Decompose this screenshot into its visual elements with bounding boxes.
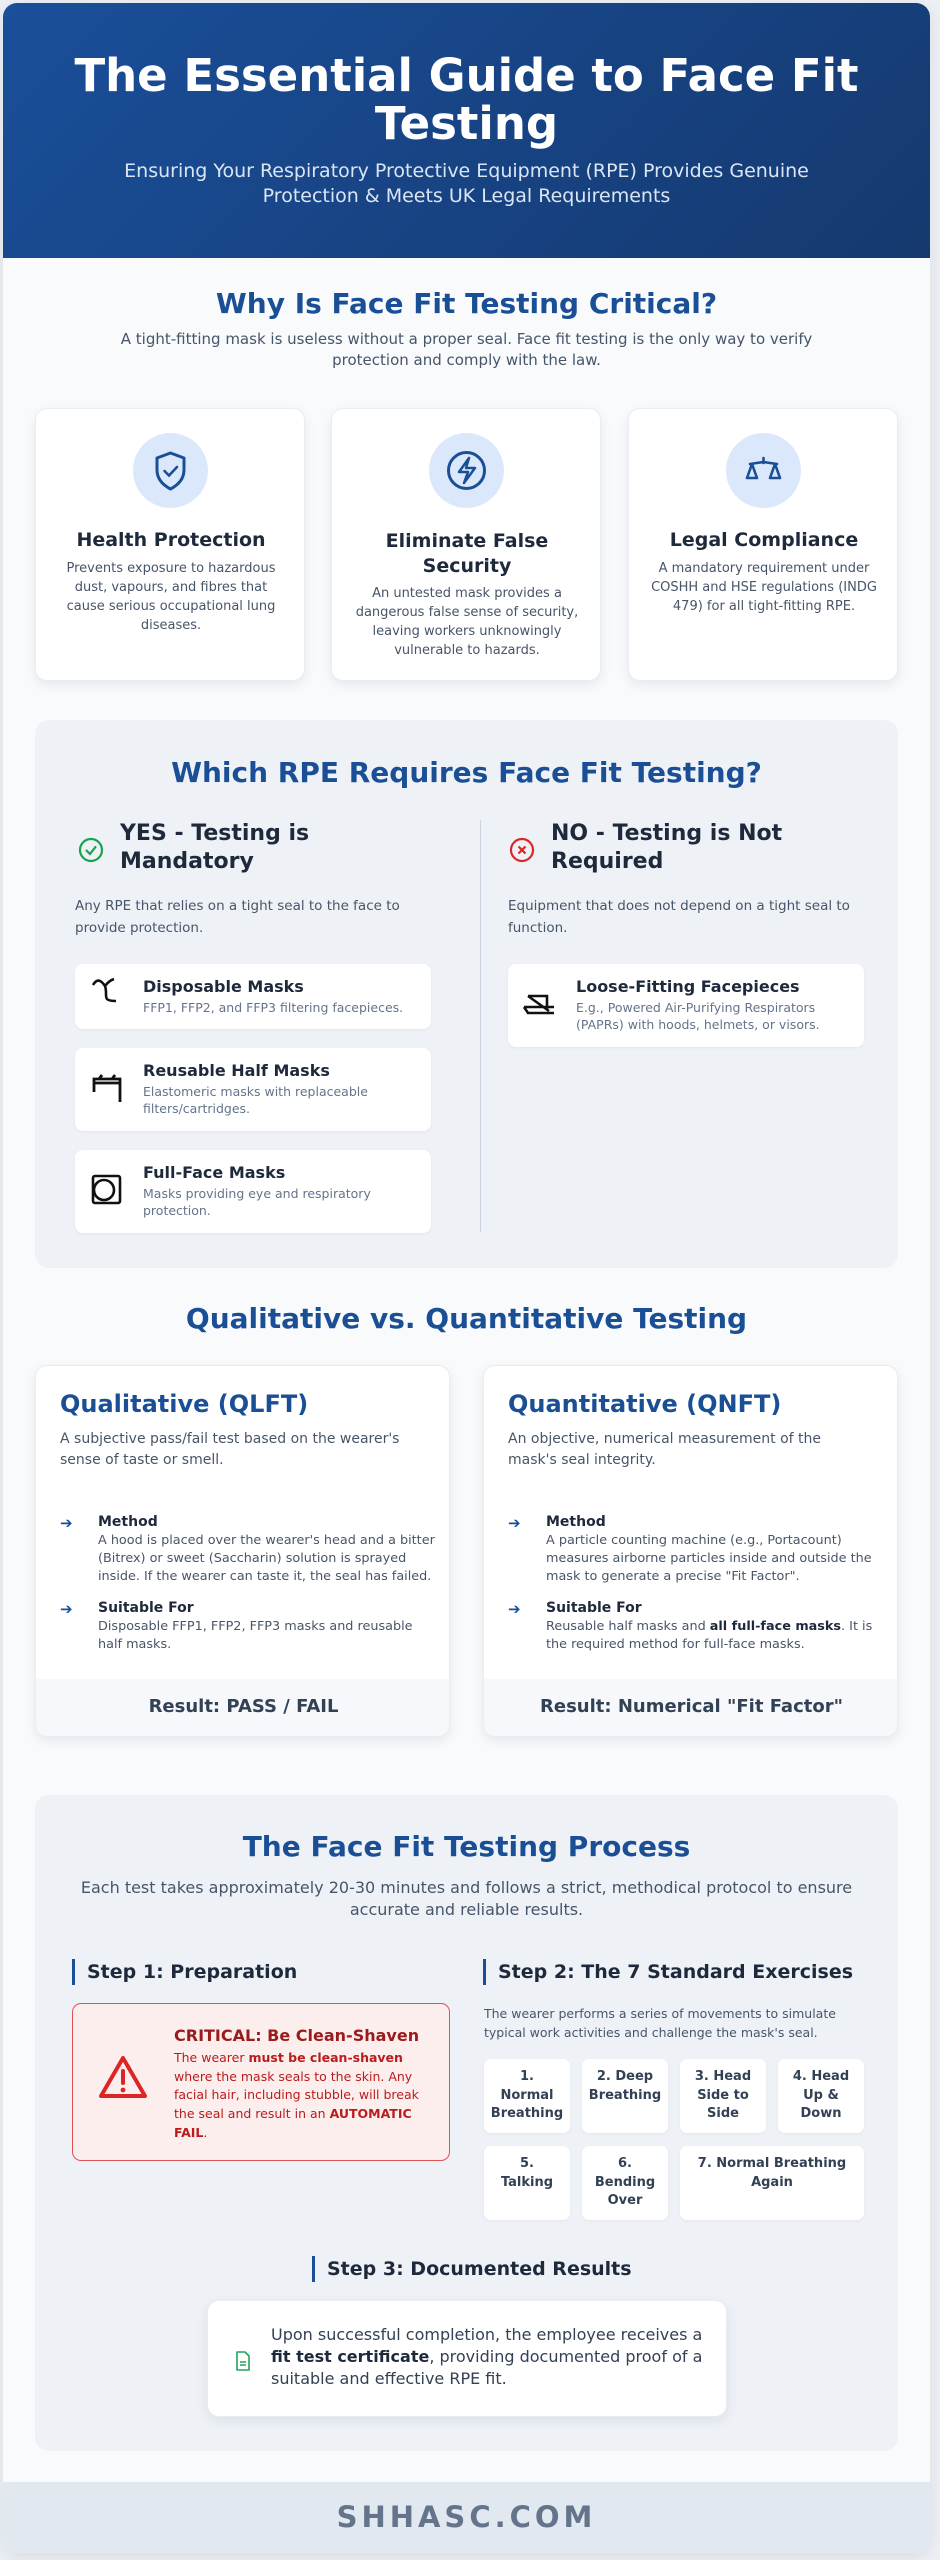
result bar <box>484 1679 899 1739</box>
card title: Legal Compliance <box>670 529 858 551</box>
bullet: suitable for: ➔ <box>508 1600 521 1618</box>
result bar: Result: Numerical "Fit Factor" <box>540 1696 843 1717</box>
icon: check <box>78 838 104 862</box>
item: disposable masks: FFP1, FFP2, and FFP3 filtering facepieces. <box>143 1000 403 1015</box>
heading: Which RPE Requires Face Fit Testing? <box>171 756 762 789</box>
card: health protection <box>35 408 305 681</box>
exercise grid: 7. Normal Breathing <box>698 2156 846 2171</box>
card: legal compliance <box>628 408 898 681</box>
bullet: suitable for: Suitable For <box>98 1600 194 1616</box>
step 2 heading: Step 2: The 7 Standard Exercises <box>498 1961 853 1983</box>
exercise grid: Again <box>751 2174 793 2190</box>
item: reusable half masks: filters/cartridges. <box>143 1101 250 1116</box>
result card: Upon successful completion, the employee receives a fit test certificate, providing documented proof of a suitable and effective RPE fit. <box>271 2325 702 2388</box>
card text: A mandatory requirement under COSHH and HSE regulations (INDG 479) for all tight-fitting RPE. <box>651 561 877 614</box>
yes heading: Mandatory <box>120 849 254 874</box>
item: full-face masks: Full-Face Masks <box>143 1163 285 1182</box>
bullet: method <box>60 1514 435 1584</box>
card text: Prevents exposure to hazardous dust, vapours, and fibres that cause serious occupational lung diseases. <box>66 561 275 633</box>
panel: process <box>35 1795 898 2451</box>
item: loose-fitting <box>508 964 864 1047</box>
column: yes <box>75 821 400 936</box>
bullet: method: ➔ <box>508 1514 521 1532</box>
card text: An objective, numerical measurement of the mask's seal integrity. <box>508 1431 821 1468</box>
title: Testing <box>375 97 558 150</box>
icon: half mask <box>92 1074 122 1102</box>
icon: full face <box>92 1174 122 1204</box>
exercise grid: Talking <box>501 2174 553 2190</box>
bullet: method: A particle counting machine (e.g., Portacount) measures airborne particles inside and outside the mask to generate a precise "Fit Factor". <box>546 1533 872 1584</box>
bullet: method: Method <box>546 1514 606 1530</box>
section intro <box>120 330 812 369</box>
card: quantitative <box>483 1365 898 1737</box>
subtitle: Protection & Meets UK Legal Requirements <box>263 185 670 207</box>
exercise grid: Breathing <box>589 2088 661 2102</box>
bullet: method: A hood is placed over the wearer's head and a bitter (Bitrex) or sweet (Saccharin) solution is sprayed inside. If the wearer can taste it, the seal has failed. <box>98 1533 435 1584</box>
exercise grid: Side <box>707 2106 739 2121</box>
icon: disposable mask <box>92 978 116 1002</box>
exercise grid: 5. <box>520 2156 534 2171</box>
item: reusable half masks: Elastomeric masks with replaceable <box>143 1084 368 1099</box>
icon: visor <box>523 994 554 1014</box>
no heading: NO - Testing is Not <box>551 821 782 846</box>
card title: Health Protection <box>76 529 266 551</box>
bullet: suitable for: Disposable FFP1, FFP2, FFP3 masks and reusable half masks. <box>98 1619 413 1652</box>
card title: Qualitative (QLFT) <box>60 1390 308 1418</box>
yes heading: YES - Testing is <box>120 821 309 846</box>
result card <box>207 2300 727 2417</box>
exercise grid: Normal <box>500 2088 554 2102</box>
header <box>3 3 930 258</box>
icon: certificate <box>236 2351 250 2371</box>
section heading: why critical: Why Is Face Fit Testing Critical? <box>216 287 717 320</box>
yes heading <box>120 821 309 874</box>
no heading <box>551 821 782 874</box>
exercise grid: 3. Head <box>695 2069 751 2084</box>
card title: Quantitative (QNFT) <box>508 1390 781 1418</box>
step 3 heading: Step 3: Documented Results <box>327 2258 632 2280</box>
card text: An untested mask provides a dangerous false sense of security, leaving workers unknowingly vulnerable to hazards. <box>356 586 578 658</box>
section intro: A tight-fitting mask is useless without a proper seal. Face fit testing is the only way to verify <box>121 330 812 348</box>
intro <box>81 1878 852 1919</box>
bullet: method <box>508 1514 872 1584</box>
item: loose-fitting: E.g., Powered Air-Purifying Respirators <box>576 1000 815 1015</box>
item: full-face masks <box>75 1150 431 1233</box>
panel: which RPE <box>35 720 898 1268</box>
icon: shield <box>133 433 208 508</box>
exercise grid: 6. <box>618 2156 632 2171</box>
title: The Essential Guide to Face Fit <box>74 49 859 102</box>
exercise grid: 4. Head <box>793 2069 849 2084</box>
exercise grid: Up & <box>803 2088 839 2102</box>
bullet: suitable for: Reusable half masks and all full-face masks. It is the required method for full-face masks. <box>546 1619 872 1652</box>
bullet: suitable for: Suitable For <box>546 1600 642 1616</box>
exercise grid <box>484 2059 864 2220</box>
item: disposable masks <box>75 964 431 1029</box>
subtitle: Ensuring Your Respiratory Protective Equipment (RPE) Provides Genuine <box>124 160 809 182</box>
bullet: method: Method <box>98 1514 158 1530</box>
exercise grid: Side to <box>697 2088 749 2102</box>
section intro: protection and comply with the law. <box>332 351 601 369</box>
subtitle <box>124 160 809 207</box>
step 1 heading: Step 1: Preparation <box>87 1961 297 1983</box>
no text: Equipment that does not depend on a tight seal to function. <box>508 898 850 936</box>
title <box>74 49 859 150</box>
result bar: Result: PASS / FAIL <box>149 1696 338 1717</box>
exercise grid: 2. Deep <box>597 2069 653 2084</box>
card title: Eliminate False <box>386 530 548 552</box>
card text: A subjective pass/fail test based on the wearer's sense of taste or smell. <box>60 1431 399 1468</box>
card: qualitative <box>35 1365 450 1737</box>
bullet: suitable for: ➔ <box>60 1600 73 1618</box>
divider <box>480 820 481 1232</box>
intro: Each test takes approximately 20-30 minutes and follows a strict, methodical protocol to ensure <box>81 1878 852 1897</box>
footer: SHHASC.COM <box>337 2500 596 2534</box>
intro: accurate and reliable results. <box>350 1900 583 1919</box>
card title: Security <box>423 555 511 577</box>
yes text: Any RPE that relies on a tight seal to the face to provide protection. <box>75 898 400 936</box>
footer <box>3 2482 930 2553</box>
exercise grid: 1. <box>520 2069 534 2084</box>
callout: critical <box>72 2003 450 2161</box>
item: reusable half masks: Reusable Half Masks <box>143 1061 330 1080</box>
no heading: Required <box>551 849 663 874</box>
card: eliminate false security <box>331 408 601 681</box>
step 2 text: The wearer performs a series of movements to simulate typical work activities and challenge the mask's seal. <box>484 2006 836 2040</box>
bullet: method: ➔ <box>60 1514 73 1532</box>
item: loose-fitting: Loose-Fitting Facepieces <box>576 977 800 996</box>
callout: critical: CRITICAL: Be Clean-Shaven <box>174 2026 419 2045</box>
result bar <box>36 1679 451 1739</box>
exercise grid: Over <box>608 2193 642 2208</box>
callout: critical: The wearer must be clean-shaven where the mask seals to the skin. Any facial hair, including stubble, will break the seal and result in an AUTOMATIC FAIL. <box>174 2050 419 2140</box>
exercise grid: Bending <box>595 2174 655 2190</box>
bullet: suitable for <box>508 1600 872 1652</box>
item: full-face masks: protection. <box>143 1203 211 1218</box>
item: reusable half masks <box>75 1048 431 1131</box>
icon: cross <box>510 838 534 862</box>
card title <box>386 530 548 577</box>
column: no <box>508 821 850 936</box>
exercise grid: Down <box>800 2106 842 2121</box>
section heading: qualitative vs quantitative: Qualitative vs. Quantitative Testing <box>186 1302 747 1335</box>
heading: The Face Fit Testing Process <box>243 1830 690 1863</box>
item: full-face masks: Masks providing eye and respiratory <box>143 1186 371 1201</box>
icon: bolt <box>429 433 504 508</box>
exercise grid: Breathing <box>491 2106 563 2121</box>
bullet: suitable for <box>60 1600 413 1652</box>
icon: scales <box>726 433 801 508</box>
icon: warning <box>99 2056 148 2098</box>
item: disposable masks: Disposable Masks <box>143 977 304 996</box>
item: loose-fitting: (PAPRs) with hoods, helmets, or visors. <box>576 1017 820 1032</box>
